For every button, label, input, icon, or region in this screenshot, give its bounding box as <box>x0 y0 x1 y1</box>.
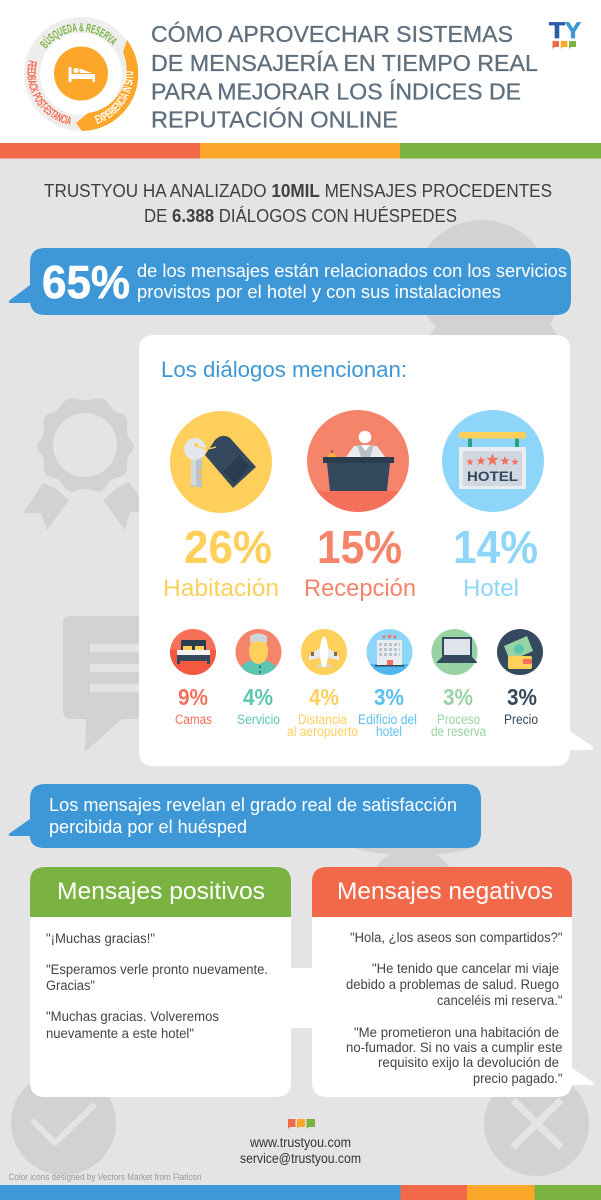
icon: guest journey cycle: EXPERIENCIA IN SITU <box>94 71 134 124</box>
stat: camas: Camas <box>175 712 212 727</box>
title: REPUTACIÓN ONLINE <box>151 106 398 132</box>
stat: hotel: 14% <box>453 521 538 573</box>
icon: guest journey cycle: FEEDBACK POST-ESTANCIA <box>27 60 70 125</box>
negative quotes <box>346 930 563 1086</box>
positive quotes: nuevamente a este hotel" <box>46 1026 194 1041</box>
footer logo flags <box>288 1119 315 1129</box>
callout: satisfaction <box>9 784 481 848</box>
icon: hotel sign <box>442 410 544 512</box>
positive header <box>30 867 291 917</box>
positive quotes: "Esperamos verle pronto nuevamente. <box>46 962 268 977</box>
icon credit: Color icons designed by Vectors Market from Flaticon <box>8 1172 202 1182</box>
callout: satisfaction: percibida por el huésped <box>49 817 247 837</box>
stat: habitación: Habitación <box>163 575 279 602</box>
stat: edificio del hotel <box>358 684 417 739</box>
panel: positive messages <box>30 867 291 1097</box>
stat: distancia al aeropuerto: 4% <box>309 684 339 710</box>
icon: reception desk <box>307 410 409 512</box>
background icon: medal <box>23 398 150 530</box>
background icon: check mark <box>11 1071 116 1175</box>
callout: 65% of messages: provistos por el hotel y con sus instalaciones <box>137 282 501 302</box>
callout: 65% of messages <box>9 248 571 315</box>
stat: edificio del hotel: hotel <box>376 724 402 739</box>
stat: recepción: 15% <box>317 521 402 573</box>
negative quotes: precio pagado." <box>473 1071 563 1086</box>
stat: precio: Precio <box>504 712 538 727</box>
logo: TrustYou <box>549 18 581 49</box>
stat: recepción <box>304 521 416 602</box>
stat: servicio <box>237 684 280 727</box>
stat: camas <box>175 684 212 727</box>
stat: proceso de reserva <box>431 684 486 739</box>
background icon: speech bubbles <box>416 220 560 344</box>
stat: edificio del hotel: 3% <box>374 684 404 710</box>
bottom color bar <box>0 1185 601 1200</box>
stat: habitación <box>163 521 279 602</box>
footer contact <box>240 1135 361 1166</box>
stat: precio: 3% <box>507 684 537 710</box>
callout: 65% of messages: 65% <box>42 256 130 308</box>
background icon: cross mark <box>484 1072 589 1176</box>
footer contact: service@trustyou.com <box>240 1151 361 1166</box>
background icon: person silhouette <box>351 833 475 911</box>
stat: distancia al aeropuerto <box>287 684 358 739</box>
panel heading: Los diálogos mencionan: <box>161 357 407 382</box>
negative header <box>312 867 572 917</box>
stat: proceso de reserva: Proceso <box>437 712 480 727</box>
stat: servicio: Servicio <box>237 712 280 727</box>
stat: edificio del hotel: Edificio del <box>358 712 417 727</box>
title: PARA MEJORAR LOS ÍNDICES DE <box>151 78 521 104</box>
negative quotes: no-fumador. Si no vais a cumplir este <box>346 1040 562 1055</box>
stat: distancia al aeropuerto: Distancia <box>298 712 347 727</box>
negative quotes: "Me prometieron una habitación de <box>354 1025 559 1040</box>
icon: room key <box>170 411 272 513</box>
stat: habitación: 26% <box>184 521 272 573</box>
stat: precio <box>504 684 538 727</box>
stat: hotel <box>453 521 538 602</box>
icon: laptop <box>432 629 478 675</box>
negative quotes: debido a problemas de salud. Ruego <box>346 977 559 992</box>
stat: servicio: 4% <box>243 684 273 710</box>
icon: wallet <box>497 629 543 675</box>
stat: hotel: Hotel <box>463 575 519 602</box>
footer contact: www.trustyou.com <box>249 1135 351 1150</box>
title <box>151 21 538 132</box>
icon: guest journey cycle: BÚSQUEDA & RESERVA <box>40 23 117 49</box>
panel: dialogue mentions <box>139 335 593 766</box>
callout: satisfaction: Los mensajes revelan el grado real de satisfacción <box>49 795 457 815</box>
icon: guest journey cycle <box>24 17 138 131</box>
icon: hotel sign: HOTEL <box>467 468 518 484</box>
stat: proceso de reserva: 3% <box>443 684 473 710</box>
positive quotes: "¡Muchas gracias!" <box>46 931 155 946</box>
stat: proceso de reserva: de reserva <box>431 724 486 739</box>
negative quotes: "He tenido que cancelar mi viaje <box>372 961 559 976</box>
icon: hotel building <box>366 629 413 677</box>
negative quotes: requisito exijo la devolución de <box>378 1055 559 1070</box>
stat: distancia al aeropuerto: al aeropuerto <box>287 724 358 739</box>
positive quotes: Gracias" <box>46 978 95 993</box>
background icon: chat bubble <box>63 616 150 752</box>
positive heading: Mensajes positivos <box>57 878 265 905</box>
intro text: DE 6.388 DIÁLOGOS CON HUÉSPEDES <box>144 206 457 226</box>
icon: bed <box>170 629 216 675</box>
header band <box>0 0 601 143</box>
intro text: TRUSTYOU HA ANALIZADO 10MIL MENSAJES PROCEDENTES <box>44 181 552 201</box>
stat: recepción: Recepción <box>304 575 416 602</box>
icon: bellboy service <box>236 629 282 680</box>
stat: camas: 9% <box>178 684 208 710</box>
callout: 65% of messages: de los mensajes están relacionados con los servicios <box>137 261 567 281</box>
title: DE MENSAJERÍA EN TIEMPO REAL <box>151 50 538 76</box>
icon: airplane <box>301 629 347 675</box>
title: CÓMO APROVECHAR SISTEMAS <box>151 21 513 47</box>
negative heading: Mensajes negativos <box>337 878 553 905</box>
positive quotes: "Muchas gracias. Volveremos <box>46 1009 219 1024</box>
positive quotes <box>46 931 268 1041</box>
logo: TrustYou: T <box>549 18 566 43</box>
negative quotes: canceléis mi reserva." <box>437 993 563 1008</box>
panel connector <box>290 968 313 1028</box>
color stripe <box>0 143 601 158</box>
intro text <box>44 181 552 226</box>
logo: TrustYou: Y <box>565 18 581 43</box>
panel: negative messages <box>312 867 594 1097</box>
negative quotes: "Hola, ¿los aseos son compartidos?" <box>350 930 563 945</box>
